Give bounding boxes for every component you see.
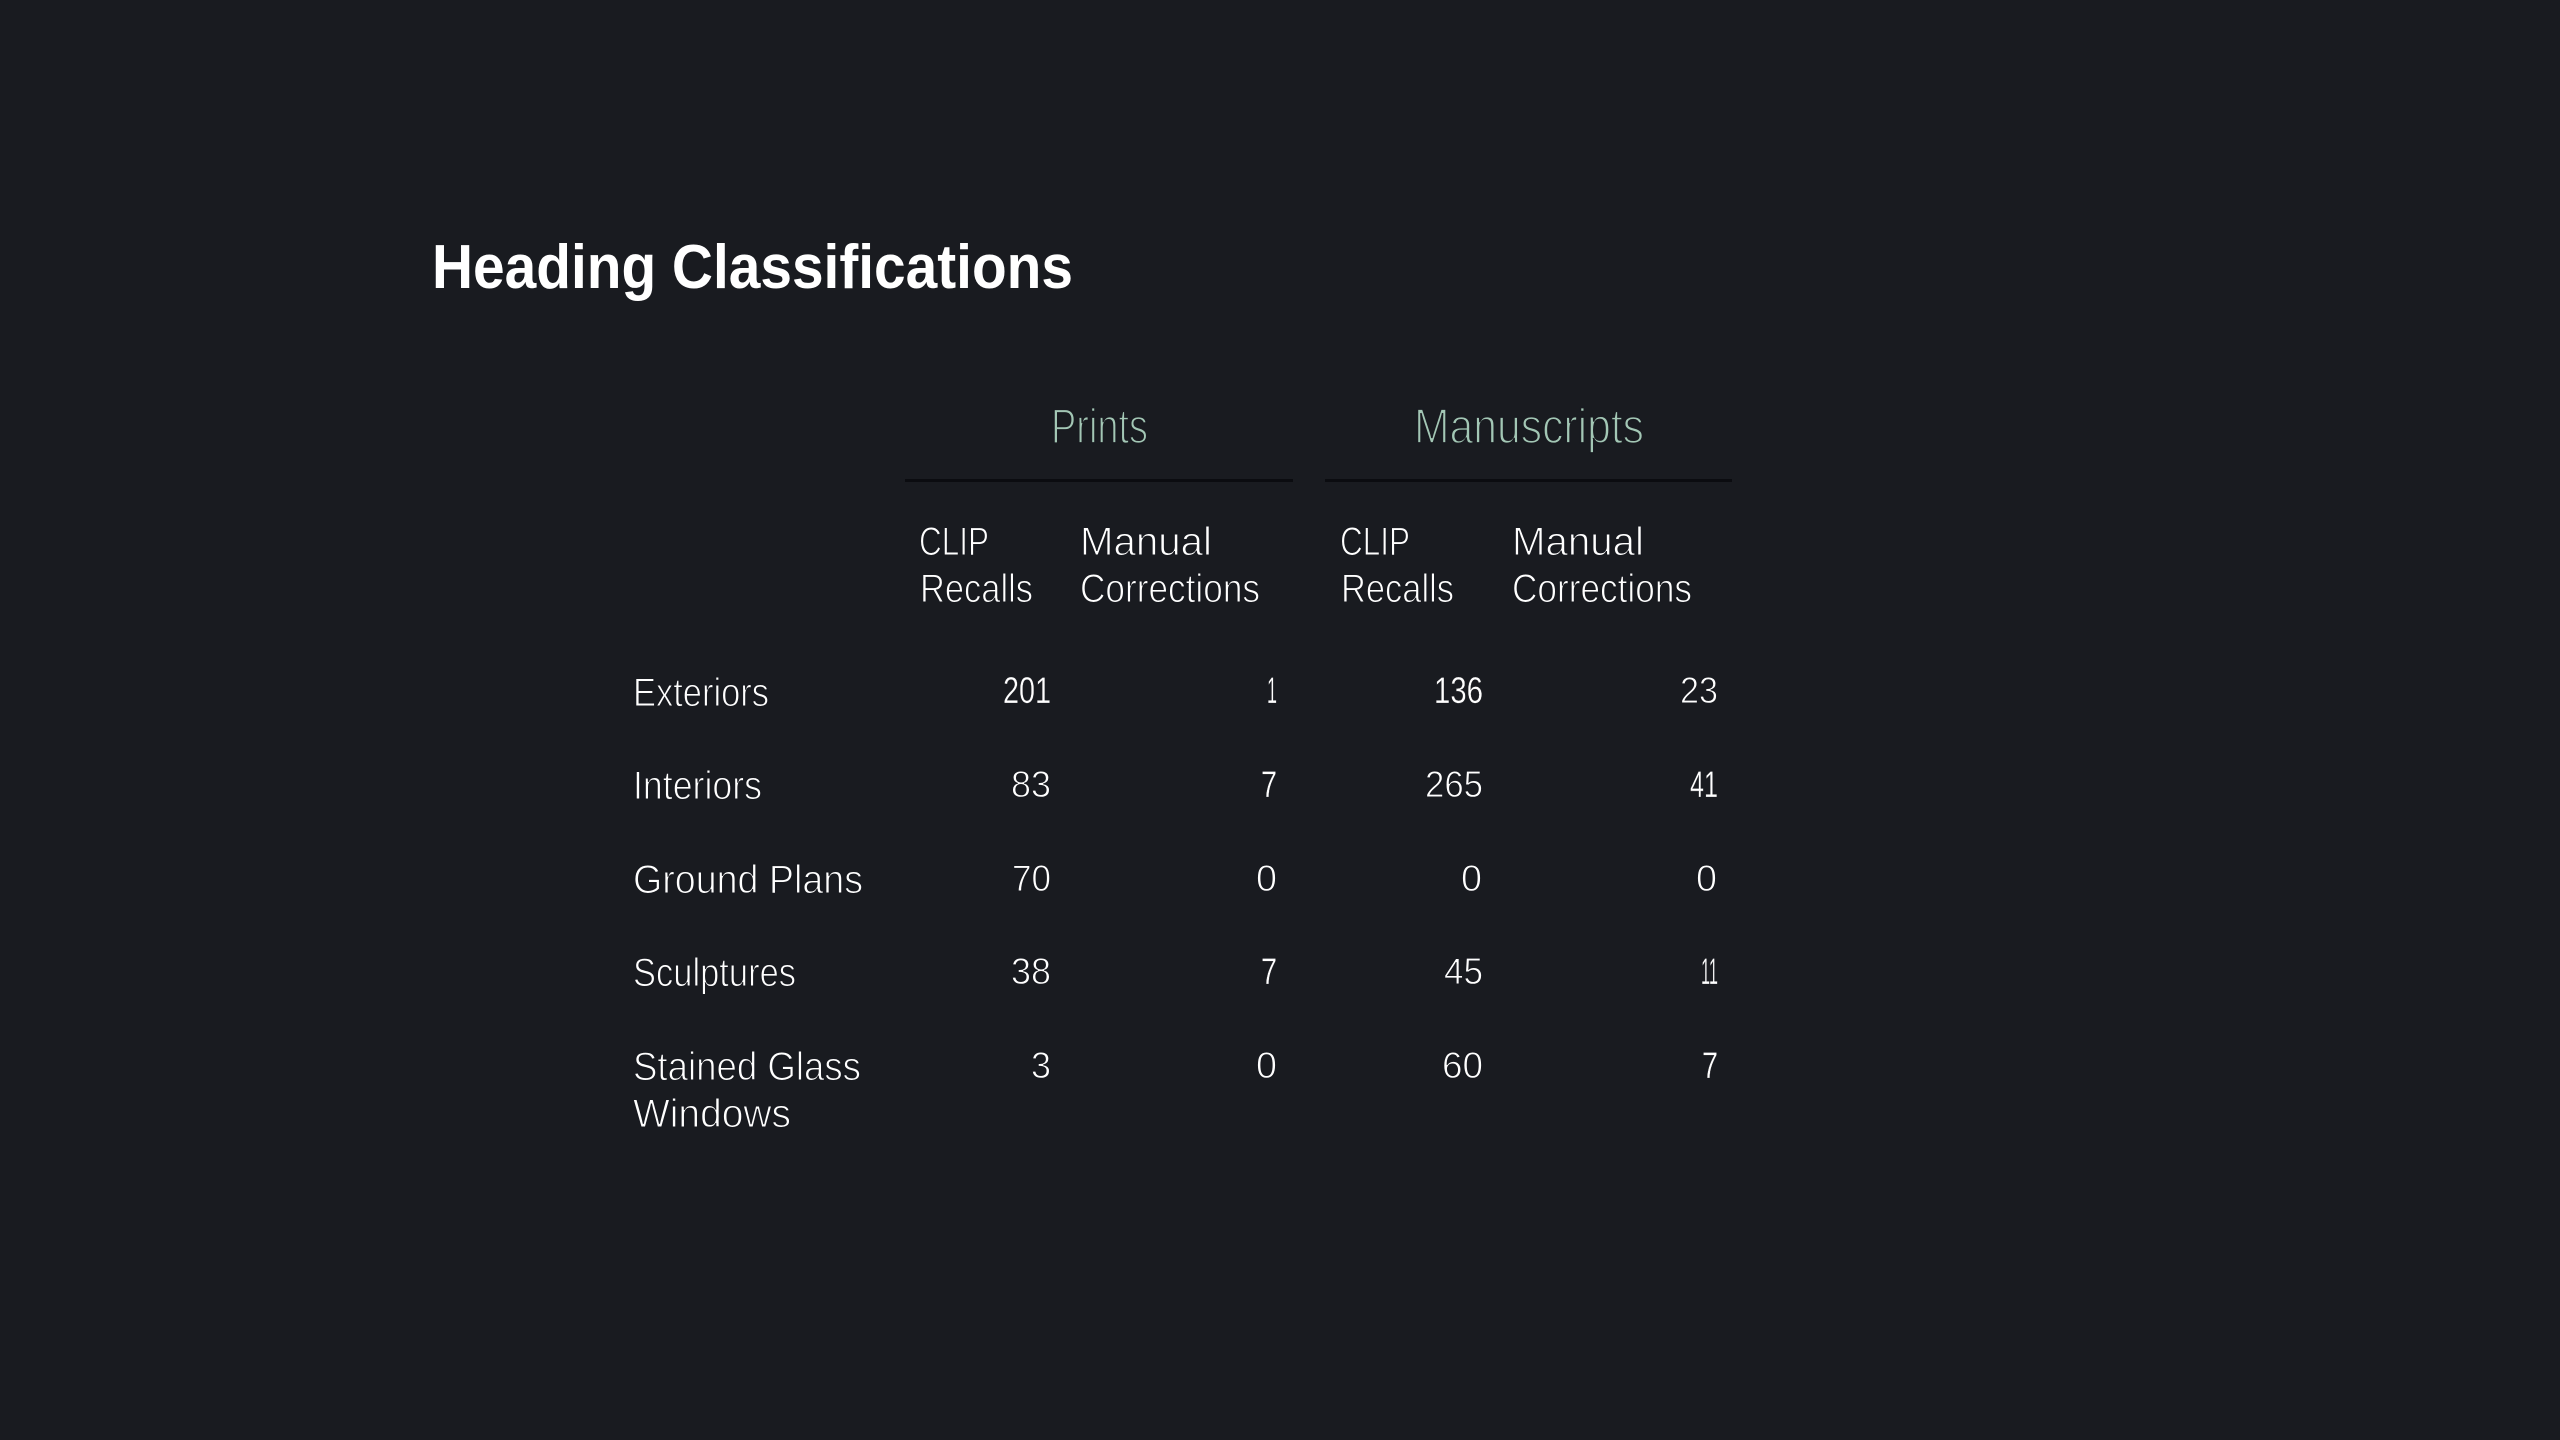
row: Exteriors: 201: [1003, 670, 1051, 711]
row: Sculptures: 45: [1444, 951, 1483, 992]
column header: Manuscripts Manual Corrections: Corrections: [1512, 567, 1692, 611]
row: Ground Plans: 0: [1461, 858, 1482, 899]
column header: Manuscripts Manual Corrections: Manual: [1512, 520, 1644, 564]
column header: Prints CLIP Recalls: [919, 520, 1033, 611]
group header: Prints: Prints: [1051, 400, 1148, 454]
row: Exteriors: 136: [1434, 670, 1483, 711]
group header: Manuscripts: [1325, 400, 1732, 482]
title: Heading Classifications: [432, 233, 1073, 302]
column header: Manuscripts CLIP Recalls: CLIP: [1340, 520, 1410, 564]
row: Interiors: 83: [1011, 764, 1051, 805]
row: Interiors: Interiors: [633, 764, 762, 808]
row: Ground Plans: Ground Plans: [633, 858, 863, 902]
row: Exteriors: [633, 670, 1718, 715]
row: Sculptures: Sculptures: [633, 951, 796, 995]
row: Stained Glass Windows: 3: [1031, 1045, 1051, 1086]
group header: Prints: [905, 400, 1293, 482]
row: Stained Glass Windows: 7: [1702, 1045, 1718, 1086]
table: 11: [1701, 951, 1718, 992]
column header: Prints CLIP Recalls: Recalls: [920, 567, 1033, 611]
row: Sculptures: [633, 951, 1718, 995]
row: Exteriors: Exteriors: [633, 671, 769, 715]
row: Ground Plans: 0: [1696, 858, 1717, 899]
row: Interiors: 7: [1261, 764, 1277, 805]
row: Stained Glass Windows: Stained Glass: [633, 1045, 861, 1089]
column header: Manuscripts CLIP Recalls: [1340, 520, 1454, 611]
row: Exteriors: 23: [1680, 670, 1718, 711]
column header: Prints Manual Corrections: Manual: [1080, 520, 1212, 564]
row: Stained Glass Windows: Windows: [633, 1092, 791, 1136]
row: Ground Plans: 0: [1256, 858, 1277, 899]
row: Stained Glass Windows: 0: [1256, 1045, 1277, 1086]
row: Interiors: 265: [1425, 764, 1483, 805]
row: Interiors: 41: [1690, 764, 1718, 805]
column header: Prints CLIP Recalls: CLIP: [919, 520, 989, 564]
row: Sculptures: 7: [1261, 951, 1277, 992]
row: Stained Glass Windows: [633, 1045, 1718, 1136]
row: Interiors: [633, 764, 1718, 808]
row: Exteriors: 1: [1267, 670, 1277, 711]
row: Ground Plans: 70: [1012, 858, 1051, 899]
row: Ground Plans: [633, 858, 1717, 902]
column header: Manuscripts Manual Corrections: [1512, 520, 1692, 611]
table: [633, 400, 1732, 1136]
column header: Prints Manual Corrections: Corrections: [1080, 567, 1260, 611]
group header: Manuscripts: Manuscripts: [1414, 400, 1644, 454]
column header: Manuscripts CLIP Recalls: Recalls: [1341, 567, 1454, 611]
row: Stained Glass Windows: 60: [1442, 1045, 1483, 1086]
row: Sculptures: 38: [1011, 951, 1051, 992]
column header: Prints Manual Corrections: [1080, 520, 1260, 611]
